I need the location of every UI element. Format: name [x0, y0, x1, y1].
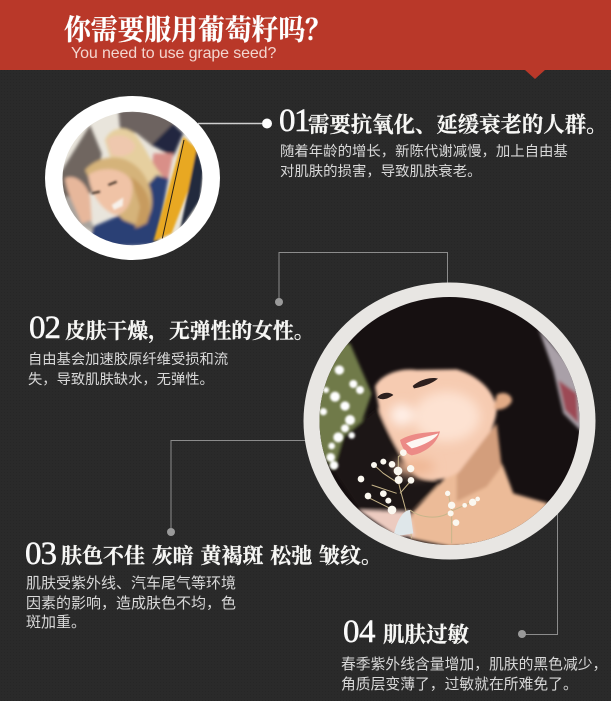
- connector 02: [275, 252, 448, 306]
- subtitle: You need to use grape seed?: [71, 45, 276, 62]
- body 03: [26, 572, 236, 632]
- section 03: [25, 536, 382, 632]
- body 01: 随着年龄的增长，新陈代谢减慢，加上自由基: [280, 140, 568, 161]
- connector 01: [198, 118, 272, 128]
- body 03: 斑加重。: [26, 611, 86, 632]
- body 04: [341, 653, 607, 694]
- section 02: [28, 310, 315, 389]
- section 01: [279, 103, 607, 181]
- body 01: 对肌肤的损害，导致肌肤衰老。: [280, 160, 481, 181]
- heading 02: 02: [29, 310, 60, 346]
- heading 03: 03: [25, 536, 56, 572]
- heading 04: 肌肤过敏: [383, 618, 469, 649]
- body 01: [280, 140, 568, 181]
- body 02: 自由基会加速胶原纤维受损和流: [28, 348, 228, 369]
- body 02: [28, 348, 228, 389]
- connector 03: [167, 440, 310, 536]
- heading 04: [343, 614, 469, 650]
- photo circle: two women in a taxi: [45, 96, 220, 260]
- header banner: [0, 0, 611, 70]
- heading 01: 01: [279, 103, 309, 139]
- icon: banner pointer: [525, 70, 545, 79]
- body 04: 春季紫外线含量增加，肌肤的黑色减少，: [341, 653, 607, 674]
- heading 04: 04: [343, 614, 375, 650]
- heading 01: 需要抗氧化、延缓衰老的人群。: [308, 108, 607, 139]
- title: 你需要服用葡萄籽吗？: [64, 7, 332, 48]
- body 04: 角质层变薄了，过敏就在所难免了。: [341, 673, 578, 694]
- body 03: 肌肤受紫外线、汽车尾气等环境: [26, 572, 236, 593]
- heading 03: 肤色不佳 灰暗 黄褐斑 松弛 皱纹。: [61, 540, 382, 570]
- body 03: 因素的影响，造成肤色不均，色: [26, 592, 236, 612]
- body 02: 失，导致肌肤缺水，无弹性。: [28, 368, 214, 389]
- photo circle: smiling woman with flowers: [304, 282, 596, 560]
- connector 04: [518, 505, 558, 638]
- heading 02: 皮肤干燥，无弹性的女性。: [65, 314, 315, 344]
- section 04: [341, 614, 607, 694]
